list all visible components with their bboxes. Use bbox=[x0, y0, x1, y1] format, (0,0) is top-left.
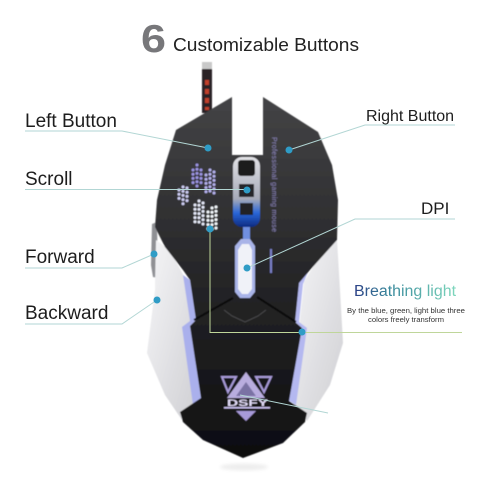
callout: breathing light: colors freely transform bbox=[368, 315, 444, 324]
right wing bbox=[290, 240, 343, 421]
DSFY logo bbox=[222, 372, 271, 421]
side slit bbox=[270, 249, 272, 273]
label: Backward bbox=[25, 296, 160, 324]
body seam lines bbox=[194, 297, 296, 322]
label: Left Button: Left Button bbox=[25, 111, 117, 132]
title: Customizable Buttons bbox=[173, 34, 359, 55]
breathing light leader line bbox=[206, 226, 462, 336]
label: DPI: DPI bbox=[421, 199, 449, 218]
forward side button bbox=[151, 222, 158, 278]
blue light strip right bbox=[288, 272, 308, 405]
DPI button bbox=[235, 239, 255, 298]
callout: breathing light: By the blue, green, light blue three bbox=[347, 306, 465, 315]
callout: breathing light: Breathing light bbox=[354, 283, 457, 300]
label: Forward: Forward bbox=[25, 247, 95, 268]
label: Right Button bbox=[286, 108, 455, 154]
mouse illustration bbox=[147, 62, 343, 458]
mouse cable bbox=[202, 62, 212, 113]
label: Scroll bbox=[25, 169, 250, 194]
chevron emboss bbox=[224, 310, 266, 322]
title bbox=[141, 18, 359, 61]
engraved side text: Professional gaming mouse bbox=[270, 137, 277, 232]
label: Scroll: Scroll bbox=[25, 169, 73, 190]
left wing bbox=[147, 240, 198, 420]
scroll wheel bbox=[233, 157, 260, 241]
logo leader line bbox=[240, 395, 328, 413]
mouse body bbox=[155, 97, 338, 458]
label: Right Button: Right Button bbox=[366, 108, 454, 125]
callout: breathing light bbox=[347, 283, 465, 324]
label: DPI bbox=[244, 199, 455, 272]
vent dots bbox=[179, 165, 216, 233]
blue light strip left bbox=[182, 275, 201, 405]
label: Forward bbox=[25, 247, 158, 268]
reflection under mouse bbox=[220, 464, 268, 470]
DSFY logo: DSFY bbox=[227, 398, 268, 408]
label: Backward: Backward bbox=[25, 303, 108, 324]
title: 6 bbox=[141, 18, 166, 61]
label: Left Button bbox=[25, 111, 212, 152]
